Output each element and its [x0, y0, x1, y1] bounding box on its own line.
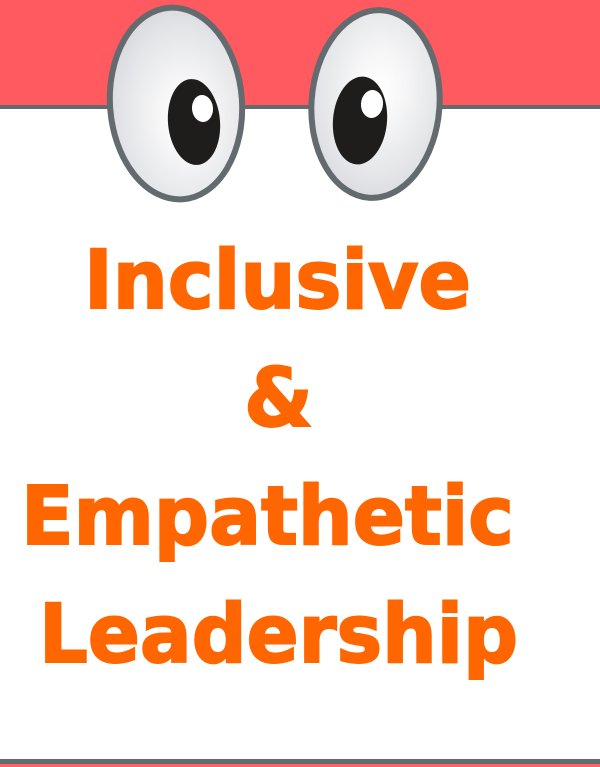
title line: Empathetic: Empathetic: [21, 470, 514, 564]
right pupil: [329, 74, 391, 167]
title line: ampersand: &: [244, 352, 313, 446]
title line: Leadership: Leadership: [39, 588, 518, 682]
left eye highlight: [191, 94, 214, 123]
icon: right eye: [305, 6, 446, 202]
icon: left eye: [103, 3, 249, 204]
right eye highlight: [360, 89, 384, 119]
left pupil: [164, 77, 224, 167]
title: [21, 234, 518, 682]
title line: Inclusive: Inclusive: [84, 234, 471, 328]
top red band: [0, 0, 600, 109]
bottom band: [0, 759, 600, 767]
